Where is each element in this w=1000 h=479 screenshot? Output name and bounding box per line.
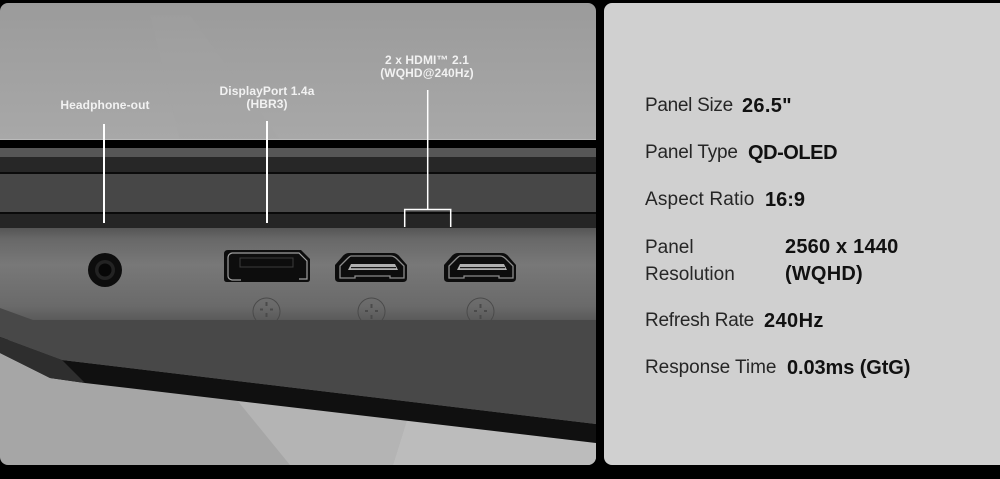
panel: specifications [604, 3, 1000, 465]
port: HDMI 2 [444, 253, 516, 282]
label: DisplayPort: DisplayPort 1.4a [220, 84, 314, 98]
icon: screw under HDMI 1 [358, 298, 385, 320]
label: HDMI: 2 x HDMI™ 2.1 [385, 53, 469, 67]
spec: refresh rate: 240Hz [764, 310, 824, 332]
port: HDMI 1 [335, 253, 407, 282]
monitor body bands [0, 140, 596, 228]
spec: panel type: QD-OLED [748, 142, 837, 164]
spec: aspect ratio: Aspect Ratio [645, 189, 755, 210]
monitor lower bezel [0, 308, 596, 424]
label: Headphone-out: Headphone-out [60, 98, 150, 112]
spec: panel resolution: Panel [645, 237, 694, 258]
spec: response time [645, 357, 910, 379]
icon: screw under HDMI 2 [467, 298, 494, 320]
leader line: Headphone-out [103, 124, 105, 223]
black underside edge [0, 337, 596, 443]
label: HDMI: (WQHD@240Hz) [380, 66, 474, 80]
spec: aspect ratio [645, 189, 805, 211]
spec: panel size [645, 95, 792, 117]
label: DisplayPort: (HBR3) [246, 97, 288, 111]
spec: panel type [645, 142, 837, 164]
spec: panel resolution: (WQHD) [785, 263, 863, 285]
spec: refresh rate: Refresh Rate [645, 310, 754, 331]
port: DisplayPort [224, 250, 310, 282]
spec: panel resolution: Resolution [645, 264, 735, 285]
spec: panel type: Panel Type [645, 142, 738, 163]
background wall top [0, 3, 596, 141]
icon: screw under DisplayPort [253, 298, 280, 320]
spec: refresh rate [645, 310, 824, 332]
spec: panel resolution [645, 236, 898, 285]
spec: panel resolution: 2560 x 1440 [785, 236, 898, 258]
spec: response time: Response Time [645, 357, 776, 378]
spec: aspect ratio: 16:9 [765, 189, 805, 211]
bracket leader: HDMI [405, 90, 451, 227]
background wall bottom [0, 340, 596, 465]
metal port strip [0, 228, 596, 320]
spec: response time: 0.03ms (GtG) [787, 357, 910, 379]
spec: panel size: Panel Size [645, 95, 733, 116]
port: headphone jack [88, 253, 122, 287]
spec: panel size: 26.5" [742, 95, 792, 117]
leader line: DisplayPort [266, 121, 268, 223]
panel: monitor port photo [0, 3, 596, 465]
